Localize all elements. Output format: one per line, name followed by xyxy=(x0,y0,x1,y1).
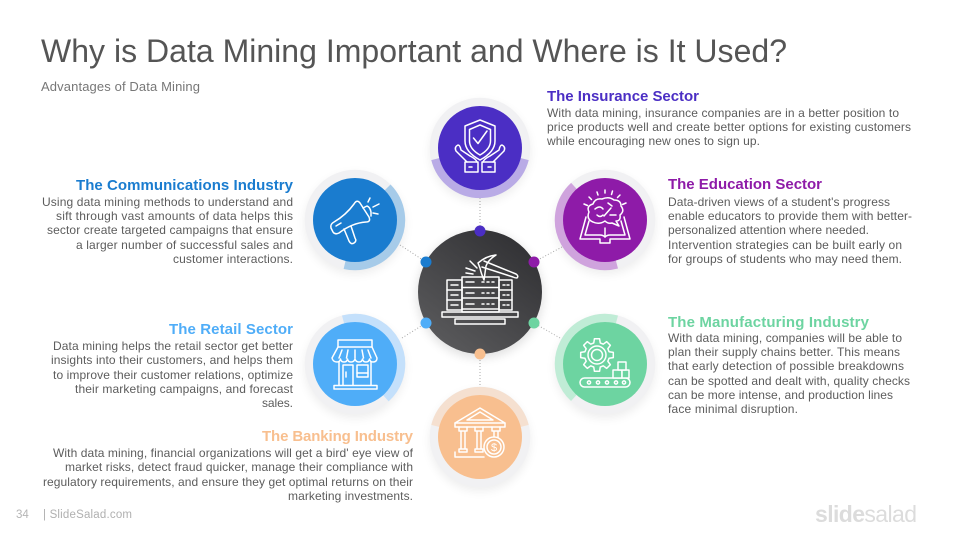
subtitle: Advantages of Data Mining xyxy=(41,79,200,94)
body: manufacturing: face minimal disruption. xyxy=(668,402,798,416)
body: manufacturing: can be spotted and dealt with, quality checks xyxy=(668,374,910,388)
body: banking xyxy=(43,446,414,503)
body: retail: to improve their customer relations, optimize xyxy=(53,368,293,382)
title: Why is Data Mining Important and Where is It Used? xyxy=(41,33,787,69)
text block: communications xyxy=(42,177,294,266)
node: retail xyxy=(305,318,405,418)
heading: insurance: The Insurance Sector xyxy=(547,88,699,105)
dot: retail xyxy=(420,318,432,328)
dot: banking xyxy=(474,348,486,360)
icon: shield in hands xyxy=(455,120,505,172)
body: retail: sales. xyxy=(262,396,293,410)
body: communications: sift through vast amounts of data helps this xyxy=(56,209,293,223)
footer: page number: 34 xyxy=(16,509,29,521)
body: education xyxy=(668,195,912,266)
node: banking xyxy=(430,391,530,491)
body: manufacturing: plan their supply chains better. This means xyxy=(668,345,900,359)
heading: banking: The Banking Industry xyxy=(262,428,414,445)
body: insurance: while encouraging new ones to sign up. xyxy=(546,134,760,148)
body: banking: market risks, detect fraud quicker, manage their compliance with xyxy=(65,460,413,474)
heading: communications: The Communications Industry xyxy=(76,177,294,194)
node: insurance xyxy=(430,102,530,202)
icon: server and pickaxe xyxy=(442,255,518,324)
icon: megaphone xyxy=(331,198,379,244)
dot: education xyxy=(528,256,540,268)
body: communications: sector create targeted campaigns that ensure xyxy=(47,223,293,237)
node: education xyxy=(555,174,655,274)
body: education: for groups of students who may need them. xyxy=(668,252,902,266)
footer: site: | SlideSalad.com xyxy=(43,509,132,521)
body: communications: customer interactions. xyxy=(173,252,293,266)
body: retail: Data mining helps the retail sector get better xyxy=(53,339,293,353)
body: insurance: With data mining, insurance companies are in a better position to xyxy=(547,106,899,120)
body: education: Intervention strategies can be built early on xyxy=(668,238,902,252)
connectors xyxy=(400,198,562,388)
body: communications: a larger number of successful sales and xyxy=(76,238,293,252)
text block: education xyxy=(668,176,912,266)
body: retail xyxy=(51,339,294,410)
node: communications xyxy=(305,174,405,274)
dot: insurance xyxy=(474,226,486,236)
body: education: Data-driven views of a student's progress xyxy=(668,195,890,209)
heading: manufacturing: The Manufacturing Industry xyxy=(668,314,870,331)
dot: communications xyxy=(420,256,432,268)
body: insurance: price products well and create better options for existing customers xyxy=(547,120,911,134)
body: banking: regulatory requirements, and ensure they get optimal returns on their xyxy=(43,475,413,489)
text block: retail xyxy=(51,321,294,410)
icon: gear and conveyor xyxy=(580,339,630,387)
text block: insurance xyxy=(546,88,911,148)
body: communications: Using data mining methods to understand and xyxy=(42,195,293,209)
body: manufacturing: With data mining, companies will be able to xyxy=(668,331,902,345)
heading: education: The Education Sector xyxy=(668,176,822,193)
footer: logo: slidesalad xyxy=(815,501,917,527)
text block: manufacturing xyxy=(668,314,910,416)
node: manufacturing xyxy=(555,318,655,418)
body: retail: insights into their customers, and helps them xyxy=(51,353,293,367)
icon: brain on open book xyxy=(580,190,630,243)
dot: manufacturing xyxy=(528,318,540,328)
body: education: personalized attention where needed. xyxy=(668,223,869,237)
central hub xyxy=(417,230,543,358)
body: education: enable educators to provide them with better- xyxy=(668,209,912,223)
body: retail: their marketing campaigns, and forecast xyxy=(75,382,294,396)
body: banking: marketing investments. xyxy=(288,489,413,503)
icon: storefront xyxy=(332,340,377,389)
body: communications xyxy=(42,195,293,266)
body: insurance xyxy=(546,106,911,148)
body: banking: With data mining, financial organizations will get a bird' eye view of xyxy=(53,446,414,460)
text block: banking xyxy=(43,428,414,503)
icon: bank with coin: $ xyxy=(491,442,497,454)
body: manufacturing: can be more intense, and production lines xyxy=(668,388,893,402)
heading: retail: The Retail Sector xyxy=(169,321,293,338)
body: manufacturing: that early detection of possible breakdowns xyxy=(668,359,904,373)
body: manufacturing xyxy=(668,331,910,416)
